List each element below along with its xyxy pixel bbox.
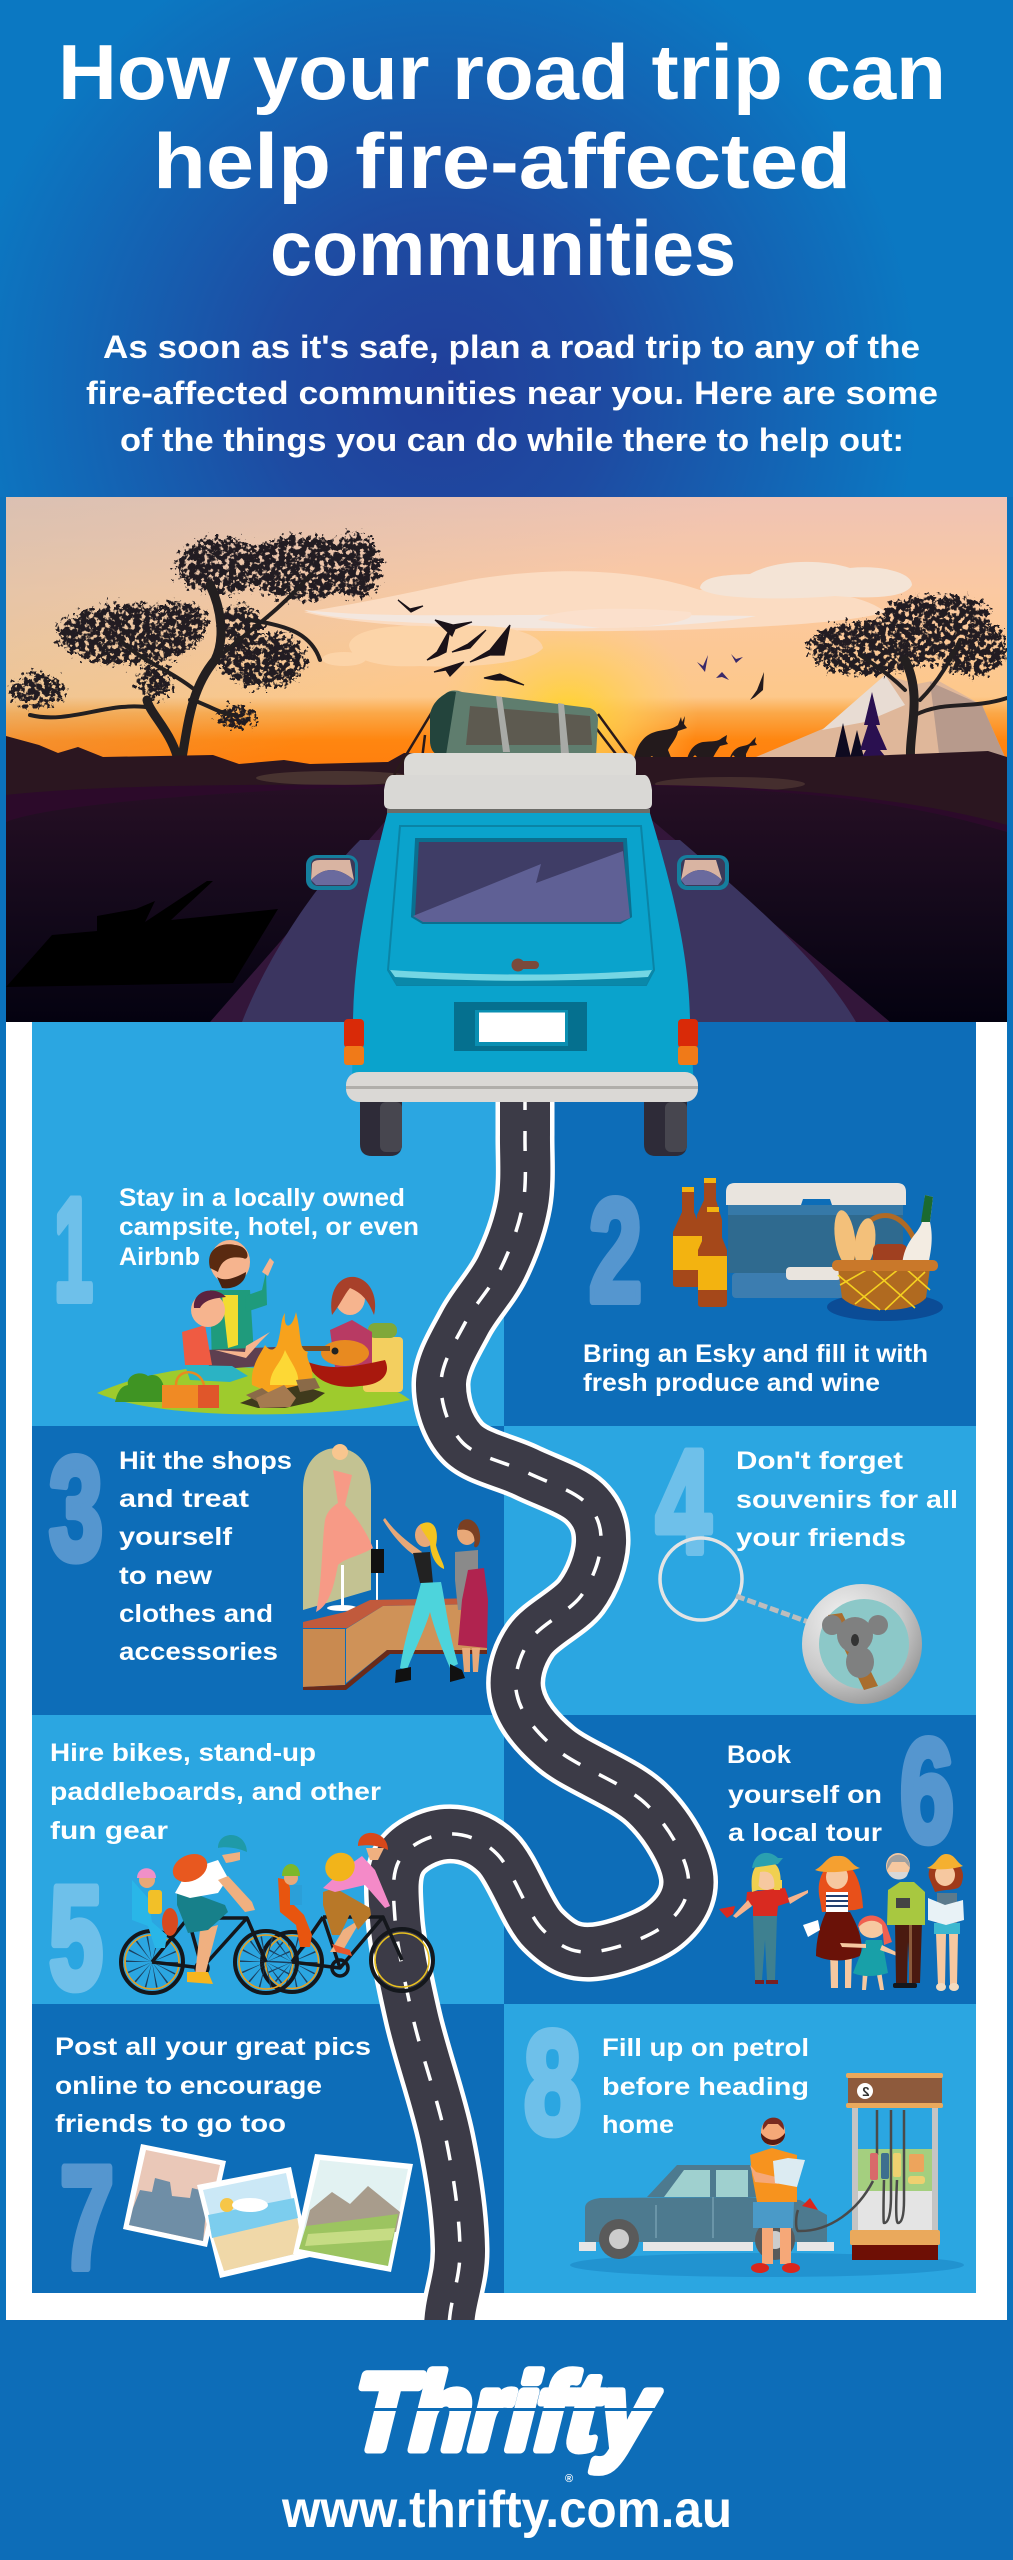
birds [398, 600, 524, 685]
side borders [0, 497, 1013, 2320]
step 4 text: your friends [736, 1524, 906, 1552]
illustration: holiday photos [123, 2144, 413, 2278]
camper van [306, 690, 729, 1156]
intro text: of the things you can do while there to help out: [120, 422, 904, 458]
koala [822, 1615, 888, 1678]
step 3 text: Hit the shops [119, 1447, 292, 1475]
highway [210, 810, 890, 1022]
woman with map [927, 1854, 964, 1991]
step 8 text: Fill up on petrol [602, 2034, 809, 2062]
distant hills [6, 736, 1007, 830]
adult rider one [168, 1835, 255, 1984]
esky [726, 1183, 906, 1298]
adult rider two [320, 1833, 390, 1956]
right tree [808, 595, 1008, 768]
father [205, 1240, 276, 1370]
illustration: family campfire [97, 1240, 410, 1414]
step numbers: 5 [49, 1856, 103, 2019]
city photo [123, 2144, 226, 2247]
mountain [756, 675, 1007, 762]
step 4 text [736, 1447, 958, 1552]
pump number: 2 [862, 2084, 870, 2099]
step 4 text: Don't forget [736, 1447, 904, 1475]
step 5 text: paddleboards, and other [50, 1778, 381, 1806]
step 8 text: home [602, 2111, 674, 2139]
beach photo [197, 2167, 310, 2278]
step 2 text: Bring an Esky and fill it with [583, 1340, 928, 1368]
intro text: fire-affected communities near you. Here are some [86, 375, 938, 411]
title: communities [270, 204, 736, 292]
left tree [11, 534, 381, 770]
bush [115, 1373, 165, 1402]
basket [162, 1372, 219, 1408]
rear window [413, 840, 630, 922]
title: How your road trip can [58, 28, 946, 116]
side mirrors [306, 855, 729, 890]
step 6 text: yourself on [728, 1781, 882, 1809]
wheels [360, 1095, 687, 1156]
step numbers: 2 [589, 1169, 642, 1332]
illustration: tour group [719, 1853, 964, 1991]
step 5 text: Hire bikes, stand-up [50, 1739, 316, 1767]
woman with guitar [300, 1277, 387, 1387]
step 3 text: to new [119, 1562, 213, 1590]
step numbers [49, 1168, 954, 2299]
rocks [240, 1378, 325, 1408]
girl [840, 1916, 898, 1990]
old man with camera [886, 1853, 925, 1988]
number plate [454, 1002, 587, 1051]
tour guide [719, 1853, 808, 1984]
car [579, 2165, 834, 2260]
child seat blue [132, 1868, 178, 1948]
step numbers: 6 [900, 1709, 954, 1872]
beer bottles [673, 1178, 727, 1307]
counter [303, 1598, 487, 1690]
step 1 text: campsite, hotel, or even [119, 1213, 419, 1241]
pine trees [835, 692, 887, 757]
van body [352, 810, 694, 1087]
backpack [363, 1323, 403, 1392]
step 6 text: Book [727, 1741, 791, 1769]
roof luggage [430, 690, 598, 755]
step 1 text: Airbnb [119, 1243, 200, 1271]
sunset landscape scene [6, 497, 1008, 1022]
kangaroos [634, 716, 757, 757]
hatch trim [388, 970, 654, 985]
title: help fire-affected [153, 117, 851, 205]
step 5 text [50, 1739, 381, 1845]
mannequin in pink dress [316, 1444, 373, 1612]
footer panel [0, 2320, 1013, 2560]
bicycle wheels [121, 1929, 433, 1993]
door handle [512, 958, 539, 972]
step numbers: 4 [656, 1420, 711, 1583]
picnic basket [827, 1195, 943, 1321]
step 7 text: Post all your great pics [55, 2033, 371, 2061]
step numbers: 1 [54, 1168, 93, 1331]
white content area [6, 1022, 1007, 2320]
step 5 text: fun gear [50, 1817, 168, 1845]
step 3 text: accessories [119, 1638, 278, 1666]
illustration: dress shop [303, 1444, 488, 1690]
illustration: koala keychain [660, 1538, 922, 1704]
step 6 text: a local tour [728, 1819, 882, 1847]
step 6 text [727, 1741, 882, 1847]
woman in skirt [803, 1856, 863, 1988]
step 7 text: online to encourage [55, 2072, 322, 2100]
step 3 text [119, 1447, 292, 1666]
step 3 text: and treat [119, 1485, 250, 1513]
step 7 text [55, 2033, 371, 2138]
title [58, 28, 946, 292]
mountain photo [293, 2154, 413, 2272]
Thrifty logo: ® [565, 2473, 573, 2485]
step 2 text: fresh produce and wine [583, 1369, 880, 1397]
step numbers: 3 [49, 1427, 103, 1590]
step 8 text: before heading [602, 2073, 809, 2101]
shopper with blonde braid [383, 1518, 465, 1683]
step numbers: 7 [60, 2136, 114, 2299]
tail lights [344, 1019, 698, 1065]
intro text [86, 329, 938, 458]
step 3 text: clothes and [119, 1600, 273, 1628]
illustration: esky and picnic basket [673, 1178, 943, 1321]
bumper [346, 1072, 698, 1102]
boy [182, 1290, 270, 1382]
website url: www.thrifty.com.au [281, 2481, 732, 2539]
pump number [857, 2083, 873, 2099]
illustration: family on bikes [121, 1833, 433, 1993]
dark ground [6, 786, 1007, 1022]
step 1 text: Stay in a locally owned [119, 1184, 405, 1212]
clouds [304, 562, 912, 666]
numbered panels background [32, 1022, 976, 2293]
step 3 text: yourself [119, 1523, 233, 1551]
distant purple birds [697, 654, 764, 700]
header panel [0, 0, 1013, 497]
step 4 text: souvenirs for all [736, 1486, 958, 1514]
roof [384, 753, 652, 813]
shopper with coat [455, 1519, 488, 1672]
step 7 text: friends to go too [55, 2110, 286, 2138]
winding road [393, 1090, 689, 2330]
shop alcove [303, 1448, 371, 1610]
man with map [750, 2118, 805, 2273]
Thrifty logo: Thrifty [340, 2352, 670, 2473]
bicycle frames [152, 1917, 402, 1976]
fuel pump [796, 2073, 943, 2260]
fire [252, 1312, 313, 1397]
child seat orange [278, 1864, 312, 1947]
ropes [394, 712, 633, 775]
vehicle shadow [6, 881, 278, 987]
step 8 text [602, 2034, 809, 2139]
sign [371, 1540, 384, 1600]
step 1 text [119, 1184, 419, 1271]
step 2 text [583, 1340, 928, 1397]
intro text: As soon as it's safe, plan a road trip to any of the [103, 329, 920, 365]
rear door outline [388, 826, 654, 985]
illustration: petrol stop [570, 2073, 964, 2277]
step numbers: 8 [524, 2001, 581, 2164]
